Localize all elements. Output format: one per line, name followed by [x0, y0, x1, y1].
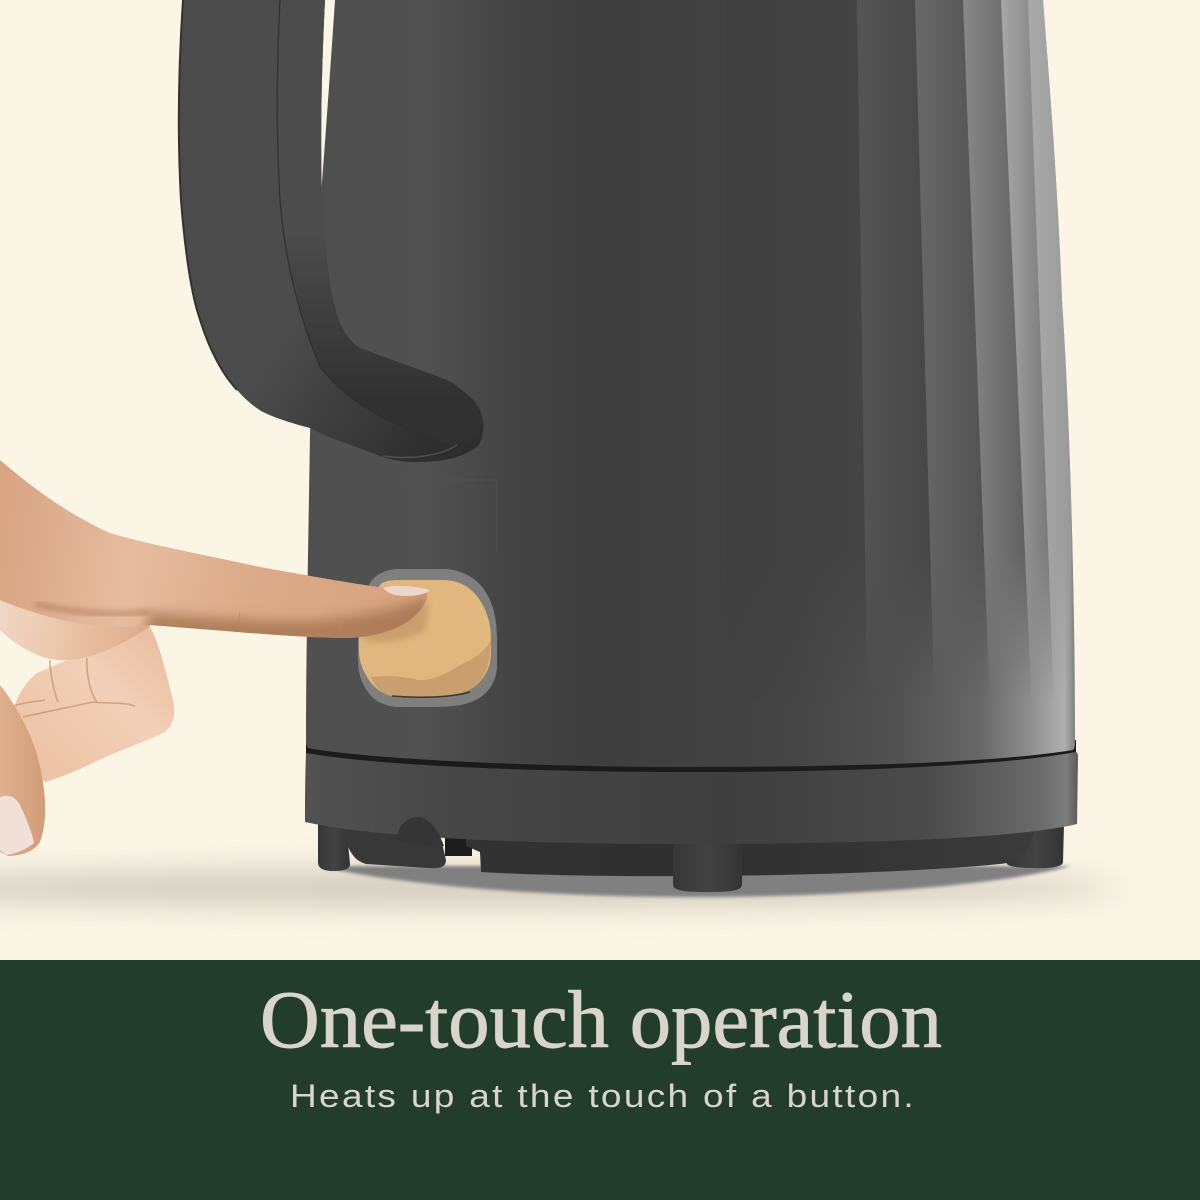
subtitle: Heats up at the touch of a button. [290, 1078, 916, 1114]
body flute bands [841, 0, 1074, 674]
title: One-touch operation [260, 974, 942, 1065]
kettle body [306, 0, 1075, 767]
handle inner face [277, 0, 482, 445]
under tray [466, 830, 1050, 876]
kettle handle [179, 0, 483, 462]
finger creases [13, 658, 135, 717]
button lower crescent [371, 640, 491, 697]
shadow under fingertip [362, 600, 430, 642]
base tray and feet [318, 822, 1064, 892]
button ring [358, 569, 497, 707]
caption band [0, 960, 1200, 1200]
thumb nail [0, 796, 34, 855]
power button [358, 569, 497, 707]
background [0, 0, 1200, 960]
folded middle finger [0, 600, 150, 660]
lower curled fingers [14, 627, 174, 782]
centre foot [673, 838, 743, 892]
finger underside shading [34, 594, 427, 638]
fingernail [383, 586, 430, 596]
cord channel [445, 836, 472, 856]
thumb [0, 685, 45, 856]
faint label rectangle [360, 480, 497, 552]
hand [0, 460, 430, 856]
cord clip [342, 826, 446, 868]
button top [359, 580, 491, 697]
notch [396, 817, 444, 846]
index finger and back of hand [0, 460, 430, 645]
base ring [305, 752, 1078, 846]
right foot [1007, 824, 1064, 868]
floor shadow [0, 866, 1120, 908]
gap between body and base [306, 740, 1076, 778]
left foot [318, 822, 350, 871]
